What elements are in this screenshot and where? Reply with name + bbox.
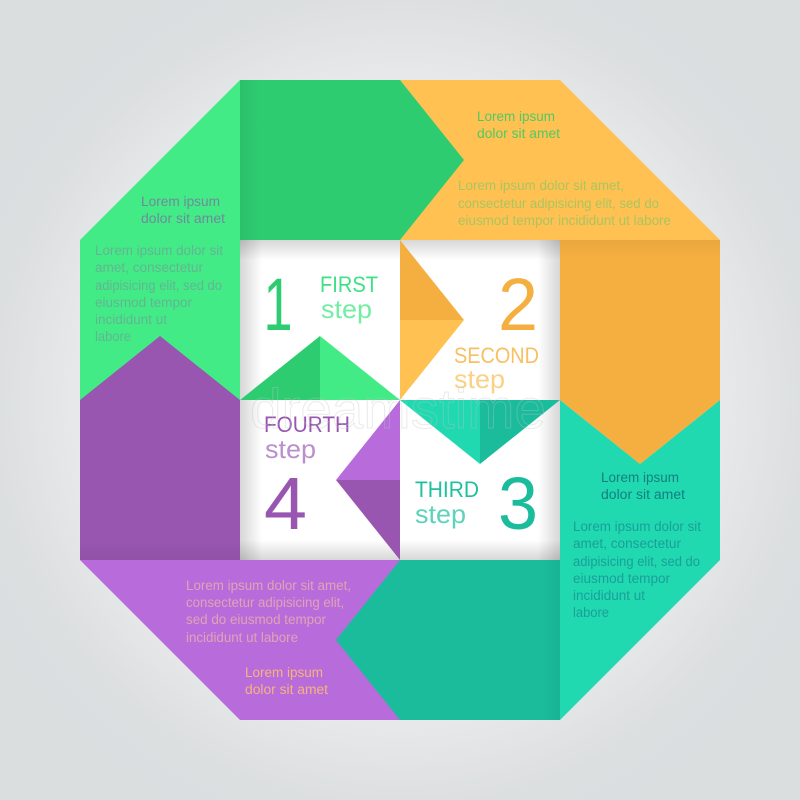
panel heading: teal: dolor sit amet [601,487,685,502]
panel body text: purple: consectetur adipisicing elit, [186,595,344,610]
panel body text: green: adipisicing elit, sed do [95,278,222,293]
centre square [240,240,560,560]
fold arrow: second step [400,240,464,400]
panel body text: teal: eiusmod tempor [573,571,671,586]
panel body text: green: incididunt ut [95,312,167,327]
panel heading: purple: dolor sit amet [245,682,328,697]
arrow band: dark purple [80,336,240,560]
panel body text: yellow: Lorem ipsum dolor sit amet, [458,178,624,193]
step 3 label: 3 [498,462,538,545]
panel heading: teal [601,470,685,502]
panel body text: green: eiusmod tempor [95,295,193,310]
panel body text: purple: Lorem ipsum dolor sit amet, [186,578,351,593]
step 1 label [264,263,378,346]
panel body text: teal: labore [573,605,609,620]
panel body text: teal: incididunt ut [573,588,645,603]
step 3 label: THIRD [415,477,479,502]
panel body text: green [95,243,223,344]
panel body text: teal: adipisicing elit, sed do [573,554,700,569]
step 2 label: step [454,364,505,394]
panel heading: green [141,194,225,226]
panel body text: yellow: eiusmod tempor incididunt ut labore [458,213,671,228]
step 1 label: step [321,294,372,324]
fold arrow: third step [400,400,560,464]
panel body text: teal [573,519,701,620]
step 1 label: 1 [264,263,292,346]
arrow band: orange [560,240,720,464]
panel body text: yellow [458,178,671,228]
panel body text: teal: amet, consectetur [573,536,681,551]
panel heading: yellow: Lorem ipsum [477,109,555,124]
panel body text: yellow: consectetur adipisicing elit, sed do [458,196,659,211]
panel body text: purple: incididunt ut labore [186,630,298,645]
panel body text: green: labore [95,329,131,344]
step 4 label: FOURTH [264,412,350,437]
panel body text: purple [186,578,351,645]
step 2 label [454,263,539,394]
fold arrow: first step [240,336,400,400]
step 3 label [415,462,538,545]
fold arrow: fourth step [336,400,400,560]
step 2 label: SECOND [454,343,539,368]
arrow band: dark green [240,80,464,240]
panel: purple [80,560,400,720]
panel heading: purple: Lorem ipsum [245,665,323,680]
panel heading: purple [245,665,328,697]
panel: green [80,80,240,400]
panel heading: green: Lorem ipsum [141,194,220,209]
step 3 label: step [415,499,466,529]
step 4 label: step [265,434,316,464]
panel body text: green: Lorem ipsum dolor sit [95,243,223,258]
panel: teal [560,400,720,720]
panel heading: green: dolor sit amet [141,211,225,226]
panel heading: yellow: dolor sit amet [477,126,560,141]
step 4 label [264,412,350,545]
panel heading: teal: Lorem ipsum [601,470,679,485]
panel body text: teal: Lorem ipsum dolor sit [573,519,701,534]
panel body text: green: amet, consectetur [95,260,203,275]
arrow band: dark teal [336,560,560,720]
step 1 label: FIRST [320,272,378,297]
step 2 label: 2 [498,263,538,346]
panel heading: yellow [477,109,560,141]
step 4 label: 4 [264,462,307,545]
watermark: dreamstime [250,377,546,440]
panel body text: purple: sed do eiusmod tempor [186,612,327,627]
panel: yellow [400,80,720,240]
